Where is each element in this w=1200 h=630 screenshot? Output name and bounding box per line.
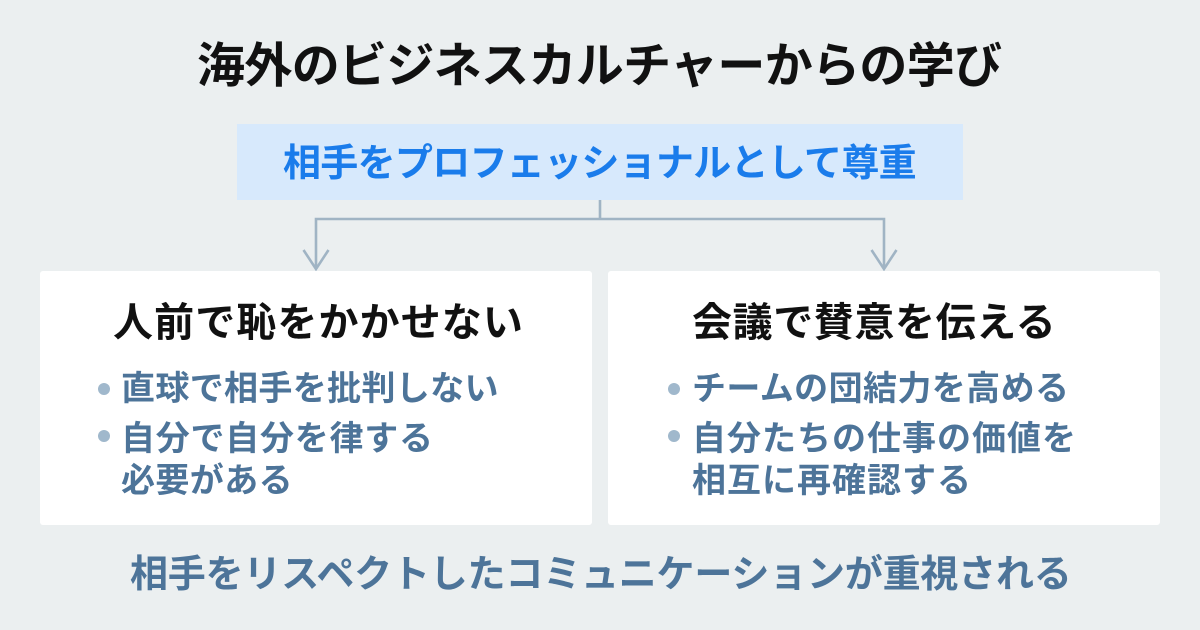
top highlighted box (237, 124, 963, 200)
left bullet 2 (98, 430, 110, 442)
right bullet 1 (668, 383, 680, 395)
left item 1: 直球で相手を批判しない (121, 370, 499, 408)
right item 2 (692, 420, 1077, 500)
title: 海外のビジネスカルチャーからの学び (197, 40, 1001, 93)
left bullet 1 (98, 383, 110, 395)
right item 2: 自分たちの仕事の価値を (692, 420, 1077, 458)
right heading: 会議で賛意を伝える (692, 301, 1056, 345)
panel: left (40, 271, 592, 525)
right item 1: チームの団結力を高める (692, 370, 1069, 408)
right bullet 2 (668, 430, 680, 442)
right item 2: 相互に再確認する (692, 462, 972, 500)
left item 2 (121, 420, 434, 500)
box text: 相手をプロフェッショナルとして尊重 (283, 143, 916, 185)
left item 2: 必要がある (121, 462, 293, 500)
left item 2: 自分で自分を律する (121, 420, 434, 458)
panel: right (608, 271, 1160, 525)
left heading: 人前で恥をかかせない (113, 301, 524, 345)
bottom conclusion: 相手をリスペクトしたコミュニケーションが重視される (130, 554, 1072, 596)
